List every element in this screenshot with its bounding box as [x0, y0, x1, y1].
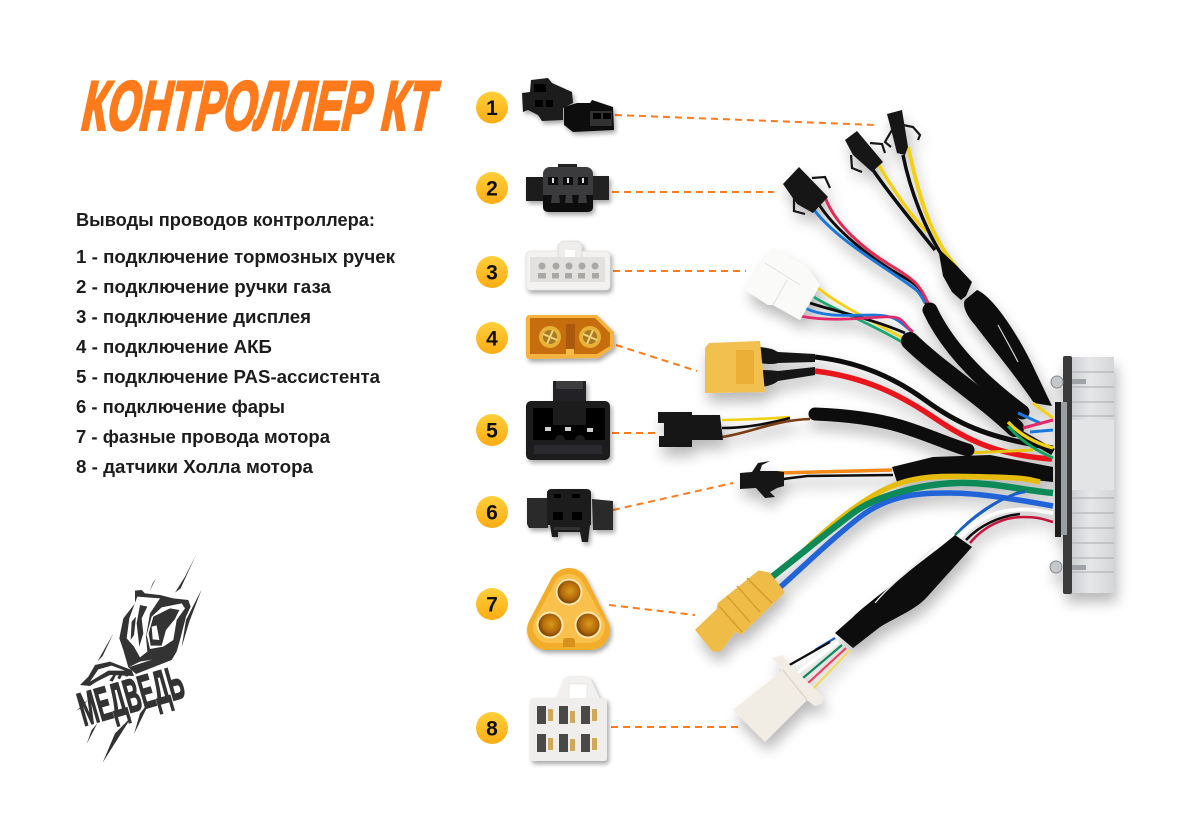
text block: wire list: 3 - подключение дисплея	[76, 307, 311, 327]
number badges: 1	[486, 97, 498, 120]
PAS connector	[658, 412, 723, 447]
phase connector MT60	[697, 572, 783, 650]
connector 3 thumbnail	[526, 241, 610, 290]
phase wires	[803, 476, 1040, 552]
battery connector XT90	[705, 341, 765, 393]
text block: wire list: 8 - датчики Холла мотора	[76, 457, 314, 477]
sheath: display	[910, 341, 1015, 428]
text block: wire list: 4 - подключение АКБ	[76, 337, 272, 357]
harness junction	[938, 248, 972, 300]
number badges: 3	[486, 262, 498, 284]
number badges: 4	[486, 328, 498, 350]
connector 2 thumbnail	[526, 164, 609, 212]
controller small wires	[968, 403, 1053, 458]
Hall lower wires	[786, 638, 850, 690]
brake connector A	[885, 110, 920, 155]
controller body	[1050, 356, 1114, 594]
logo: bear: МЕДВЕДЬ	[72, 655, 190, 736]
controller screws	[1050, 376, 1086, 573]
brake connector B	[845, 131, 885, 172]
sheath: brake	[964, 290, 1052, 406]
connector 1 thumbnail	[522, 78, 614, 132]
battery connector boots	[760, 347, 815, 387]
text block: wire list: 7 - фазные провода мотора	[76, 427, 331, 447]
display wires	[800, 288, 913, 342]
logo: bear	[72, 555, 202, 763]
battery wires	[815, 357, 1053, 448]
throttle connector	[783, 167, 830, 214]
list heading: Выводы проводов контроллера:	[76, 210, 375, 230]
connector 6 thumbnail	[527, 489, 613, 542]
black wires to controller	[1005, 425, 1053, 452]
headlight wires	[778, 470, 892, 473]
title: КОНТРОЛЛЕР КТ	[76, 67, 444, 144]
sheath: throttle	[930, 310, 1022, 412]
brake wires	[873, 147, 957, 268]
PAS wires	[722, 417, 810, 437]
Hall wires	[955, 490, 1053, 543]
number badges: 5	[486, 420, 498, 442]
connector 7 thumbnail	[536, 578, 602, 647]
number badges: 8	[486, 718, 498, 740]
connector 4 thumbnail	[526, 315, 614, 359]
wiring harness	[658, 110, 1114, 742]
leader lines	[609, 115, 876, 727]
number badges: 6	[486, 502, 498, 524]
connector 8 thumbnail	[530, 676, 607, 761]
text block: wire list: 2 - подключение ручки газа	[76, 277, 332, 297]
text block: wire list: 1 - подключение тормозных ручек	[76, 247, 396, 267]
number badges: 2	[486, 178, 498, 200]
text block: wire list: 6 - подключение фары	[76, 397, 285, 417]
headlight sheath	[892, 455, 1053, 482]
display connector	[745, 248, 820, 320]
throttle wires	[812, 197, 928, 305]
Hall sheath	[835, 535, 972, 648]
number badges: 7	[486, 594, 498, 616]
connector 5 thumbnail	[526, 381, 610, 460]
text block: wire list: 5 - подключение PAS-ассистента	[76, 367, 381, 387]
headlight connector	[740, 461, 784, 498]
Hall connector	[733, 655, 823, 742]
PAS sheath	[815, 414, 968, 450]
number badges	[476, 92, 508, 744]
text block: wire list	[76, 210, 396, 477]
